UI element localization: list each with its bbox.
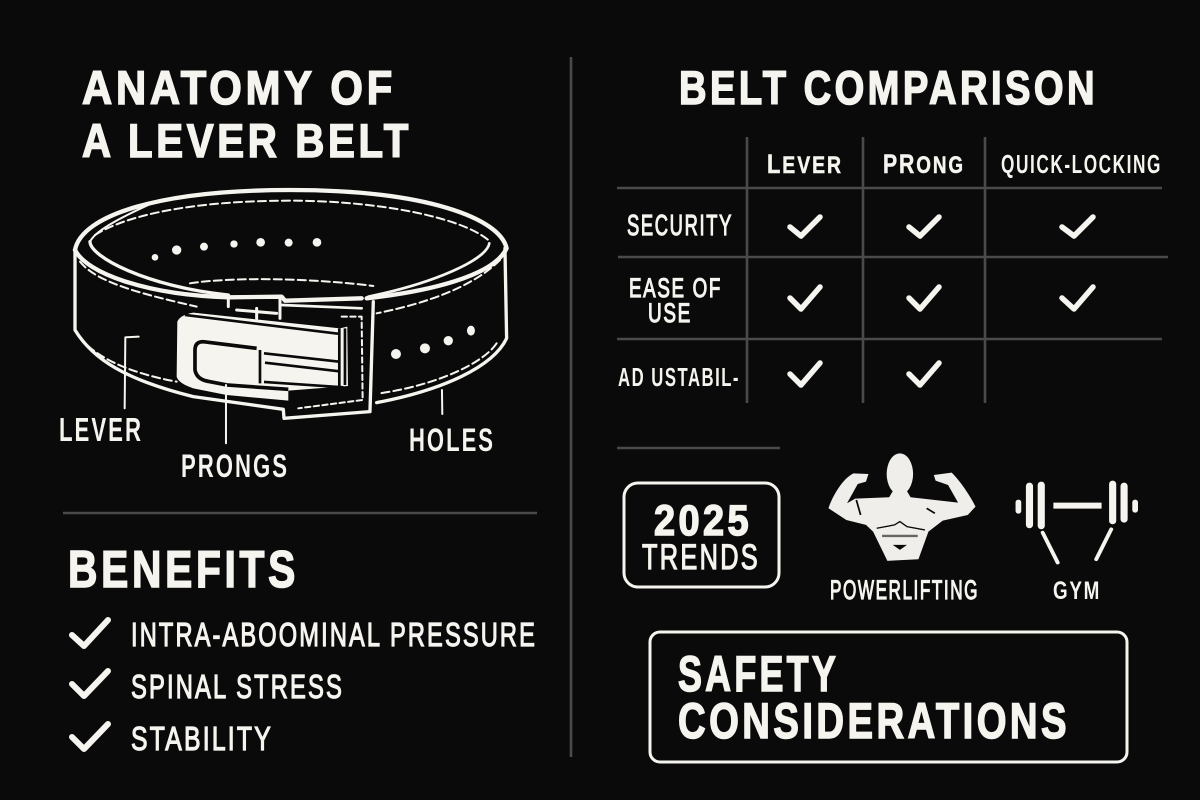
panel: belt comparison bbox=[617, 61, 1168, 448]
benefit: stability: STABILITY bbox=[131, 720, 273, 757]
badge: 2025 trends: 2025 bbox=[654, 497, 752, 545]
row labels: USE bbox=[648, 298, 692, 328]
panel: anatomy of a lever belt bbox=[59, 61, 507, 484]
icon: flexing lifter bbox=[828, 453, 976, 561]
badge: 2025 trends: TRENDS bbox=[642, 538, 760, 577]
check marks bbox=[790, 217, 1093, 385]
title: anatomy of a lever belt: ANATOMY OF bbox=[82, 61, 396, 114]
panel: benefits bbox=[68, 541, 537, 757]
row labels bbox=[618, 210, 740, 392]
heading: belt comparison: BELT COMPARISON bbox=[679, 61, 1098, 114]
badge: 2025 trends bbox=[624, 483, 779, 587]
icon: barbell bbox=[1018, 484, 1135, 563]
callout: safety considerations: SAFETY bbox=[678, 646, 839, 702]
part label: prongs: PRONGS bbox=[181, 448, 289, 484]
panel: 2025 trends bbox=[624, 453, 1135, 605]
benefit: intra-abdominal pressure: INTRA-ABOOMINAL PRESSURE bbox=[131, 616, 537, 653]
label: powerlifting: POWERLIFTING bbox=[830, 575, 979, 605]
belt stitching bbox=[80, 201, 500, 408]
row labels: AD USTABIL- bbox=[618, 362, 740, 392]
row labels: EASE OF bbox=[629, 273, 722, 303]
callout: safety considerations bbox=[650, 632, 1127, 762]
part label: lever: LEVER bbox=[59, 411, 143, 448]
belt illustration bbox=[75, 190, 507, 443]
column headers: PRONG bbox=[883, 149, 965, 179]
leader lines bbox=[125, 337, 442, 443]
heading: benefits: BENEFITS bbox=[68, 541, 299, 599]
column headers bbox=[767, 149, 1162, 179]
belt outer outline bbox=[75, 190, 507, 418]
column headers: LEVER bbox=[767, 149, 843, 179]
benefit: spinal stress bbox=[72, 668, 344, 705]
callout: safety considerations: CONSIDERATIONS bbox=[678, 693, 1070, 749]
label: gym: GYM bbox=[1053, 577, 1101, 605]
title: anatomy of a lever belt: A LEVER BELT bbox=[82, 114, 412, 167]
title: anatomy of a lever belt bbox=[82, 61, 412, 167]
benefit: intra-abdominal pressure bbox=[72, 616, 537, 653]
lever buckle bbox=[177, 297, 348, 401]
row labels: SECURITY bbox=[627, 210, 733, 242]
benefit: stability bbox=[72, 720, 273, 757]
comparison table bbox=[617, 137, 1168, 403]
benefit: spinal stress: SPINAL STRESS bbox=[131, 668, 344, 705]
part label: holes: HOLES bbox=[409, 422, 495, 458]
belt holes bbox=[152, 238, 475, 359]
